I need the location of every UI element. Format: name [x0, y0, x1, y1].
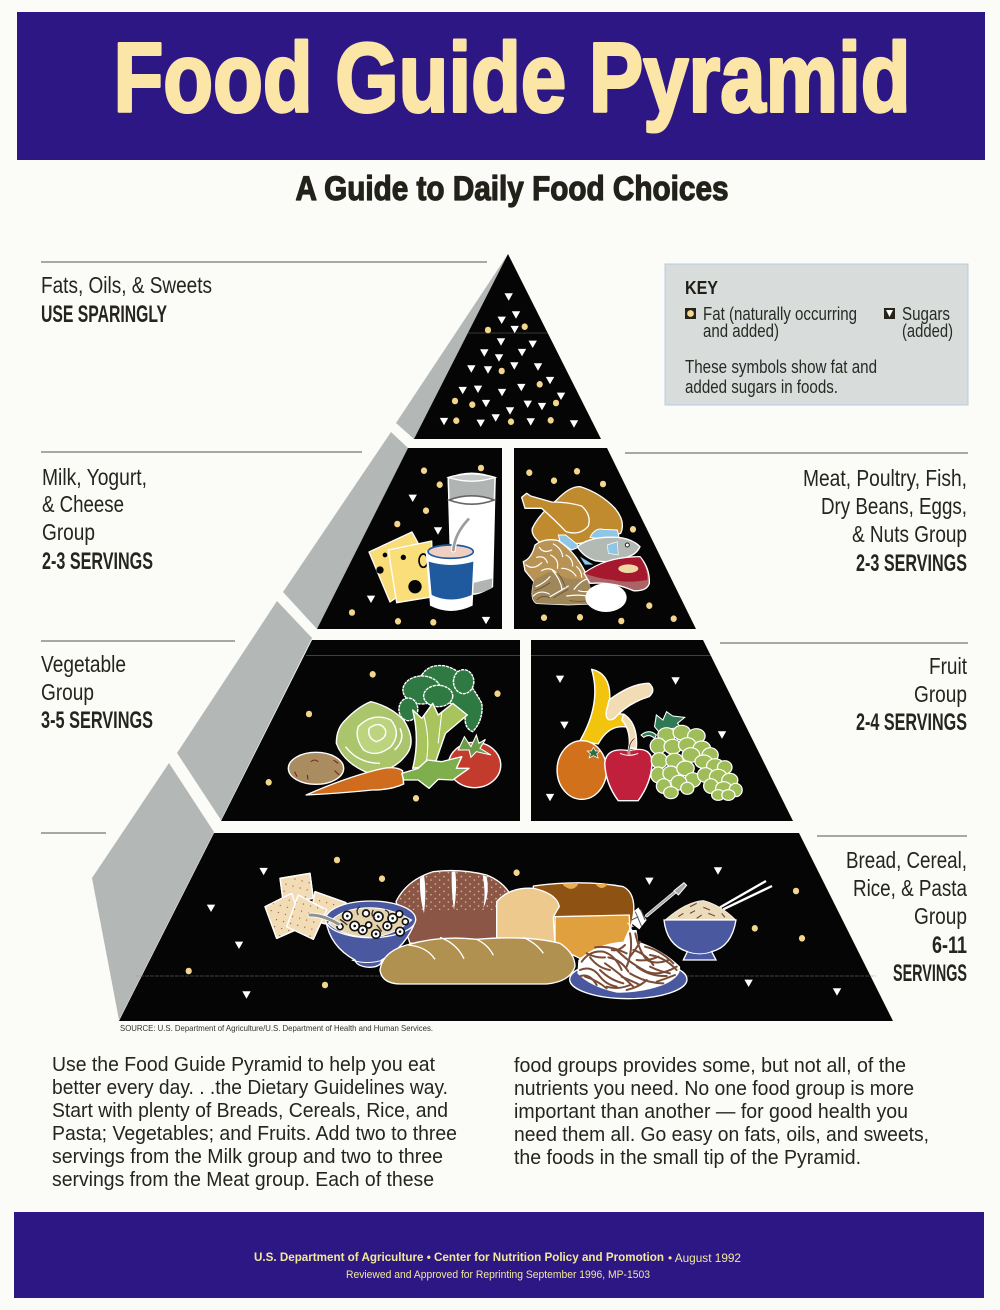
key panel: and added)	[703, 321, 779, 341]
footer band	[14, 1212, 984, 1298]
subtitle: A Guide to Daily Food Choices	[296, 170, 728, 208]
body text: left column: Pasta; Vegetables; and Fruits. Add two to three	[52, 1123, 457, 1145]
body text: left column: Use the Food Guide Pyramid to help you eat	[52, 1054, 435, 1076]
body text: left column: better every day. . .the Dietary Guidelines way.	[52, 1077, 448, 1099]
footer reprint line: Reviewed and Approved for Reprinting September 1996, MP-1503	[346, 1269, 650, 1281]
body text: right column: food groups provides some, but not all, of the	[514, 1055, 906, 1077]
tier: vegetable	[221, 640, 520, 821]
food: broccoli, cabbage, potato, carrot, tomato	[288, 666, 501, 795]
footer credit line: • August 1992	[668, 1251, 741, 1265]
label: bread group: Rice, & Pasta	[853, 875, 967, 901]
header banner	[17, 12, 985, 160]
tier: bread cereal rice pasta	[119, 833, 893, 1021]
label: fats oils sweets: Fats, Oils, & Sweets	[41, 272, 212, 298]
key panel: added sugars in foods.	[685, 377, 838, 397]
icon: fat symbol	[685, 308, 696, 319]
body text: right column: need them all. Go easy on fats, oils, and sweets,	[514, 1124, 929, 1146]
label: meat group: Meat, Poultry, Fish,	[803, 465, 967, 491]
source note: SOURCE: U.S. Department of Agriculture/U.S. Department of Health and Human Services.	[120, 1023, 433, 1033]
label: meat group: Dry Beans, Eggs,	[821, 493, 967, 519]
label: milk group: Milk, Yogurt,	[42, 464, 147, 490]
label: fats oils sweets	[41, 262, 487, 328]
body text: left column: servings from the Milk group and two to three	[52, 1146, 443, 1168]
key panel	[665, 264, 968, 405]
footer credit line: U.S. Department of Agriculture • Center for Nutrition Policy and Promotion	[254, 1250, 664, 1264]
tier: fruit	[531, 640, 793, 821]
body text: right column: the foods in the small tip of the Pyramid.	[514, 1147, 861, 1169]
food: spaghetti, fork, rice bowl	[570, 881, 772, 999]
key panel: Sugars	[902, 304, 950, 324]
body text: left column: Start with plenty of Breads, Cereals, Rice, and	[52, 1100, 448, 1122]
label: vegetable group: Vegetable	[41, 651, 126, 677]
label: milk group	[41, 452, 362, 575]
body text: right column: important than another — for good health you	[514, 1101, 908, 1123]
key panel: (added)	[902, 321, 953, 341]
key panel: Fat (naturally occurring	[703, 304, 857, 324]
food: turkey, fish, steak, nuts, egg	[522, 487, 649, 612]
food: banana, orange, apple, grapes	[557, 669, 742, 801]
label: meat group: & Nuts Group	[852, 521, 967, 547]
label: vegetable group: 3-5 SERVINGS	[41, 707, 153, 734]
food: french loaf	[380, 937, 575, 984]
label: fruit group: Fruit	[929, 653, 968, 679]
body text: right column: nutrients you need. No one food group is more	[514, 1078, 914, 1100]
tier: fats oils sweets	[414, 254, 601, 439]
label: milk group: & Cheese	[42, 491, 124, 517]
food: crackers, cereal bowl, loaves	[265, 871, 511, 967]
key panel: KEY	[685, 278, 718, 298]
tier: meat poultry fish	[514, 448, 696, 629]
tier: milk yogurt cheese	[317, 448, 502, 629]
food: milk, cheese, yogurt	[369, 473, 495, 610]
label: bread group: Group	[914, 903, 967, 929]
label: vegetable group: Group	[41, 679, 94, 705]
label: fruit group	[720, 643, 968, 736]
body text: right column	[514, 1055, 929, 1169]
label: bread group: 6-11	[932, 932, 967, 959]
leader line: bread group	[41, 832, 106, 834]
label: milk group: 2-3 SERVINGS	[42, 548, 153, 575]
body text: left column	[52, 1054, 457, 1191]
label: bread group: Bread, Cereal,	[846, 847, 967, 873]
body text: left column: servings from the Meat group. Each of these	[52, 1169, 434, 1191]
label: milk group: Group	[42, 519, 95, 545]
label: fats oils sweets: USE SPARINGLY	[41, 301, 167, 328]
key panel: These symbols show fat and	[685, 357, 877, 377]
food: sandwich loaf	[497, 883, 634, 958]
label: bread group	[817, 836, 967, 987]
icon: sugar symbol	[884, 308, 895, 319]
pyramid grey side faces	[92, 254, 508, 1020]
label: vegetable group	[41, 641, 235, 734]
label: meat group	[625, 453, 968, 577]
label: fruit group: Group	[914, 681, 967, 707]
pyramid	[92, 254, 893, 1021]
